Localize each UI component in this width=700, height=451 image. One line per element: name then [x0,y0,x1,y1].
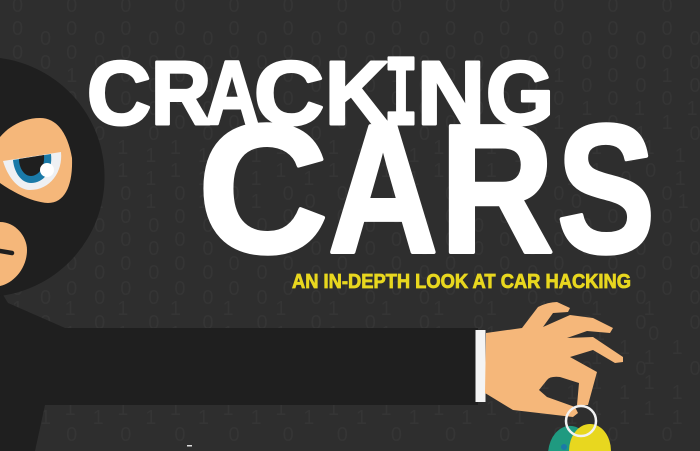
title: cracking: C [254,44,324,144]
burglar body and arm [0,290,478,451]
title: cars: A [328,86,438,291]
title: cracking: N [417,44,485,144]
title: cars: R [440,86,554,291]
shirt cuff [476,330,486,402]
binary digit background: 0000000000000 [12,278,700,300]
title: cracking: C [87,44,151,144]
title: cracking: R [151,44,211,144]
hand holding keys [485,302,623,417]
binary digit background: 0000000000000 [12,18,700,40]
title: cars: S [557,86,655,291]
binary digit background: 0100000100101 [12,65,700,87]
key ring [566,406,596,436]
subtitle: AN IN-DEPTH LOOK AT CAR HACKING [292,270,631,293]
eye [3,152,61,190]
title: cracking: G [486,44,554,144]
binary digit background: 0000000000000 [12,229,700,251]
burglar balaclava head [0,58,105,296]
title: cracking [87,42,554,155]
mouth opening [0,222,27,286]
binary digit background: 1111111111010 [12,323,700,345]
eye opening [0,118,72,203]
binary digit background: 1111111111111 [12,137,698,159]
binary digit background: 0000000000000 [12,424,700,446]
small white mark at bottom edge [187,445,192,446]
key fobs [548,424,611,451]
title: cracking: I [384,42,418,155]
binary digit background: 0000000000000 [12,42,700,64]
binary digit background: 0000000000101 [12,112,700,134]
title: cars [198,86,655,291]
title: cracking: A [205,44,259,144]
binary digit background: 0000000000000 [12,88,700,110]
title: cracking: K [325,44,389,144]
binary digit background: 0000000000000 [12,206,700,228]
binary digit background: 1111111111111 [12,398,698,420]
mouth [0,251,12,253]
binary digit background: 1111111111110 [12,160,699,182]
binary digit background: 1111111111111 [12,298,698,320]
binary digit background: 0000000000010 [12,183,700,205]
title: cars: C [198,86,328,291]
binary digit background: 1111111111111 [12,372,698,394]
binary digit background: 1111111111111 [12,347,698,369]
binary digit background: 0000000000000 [12,253,700,275]
